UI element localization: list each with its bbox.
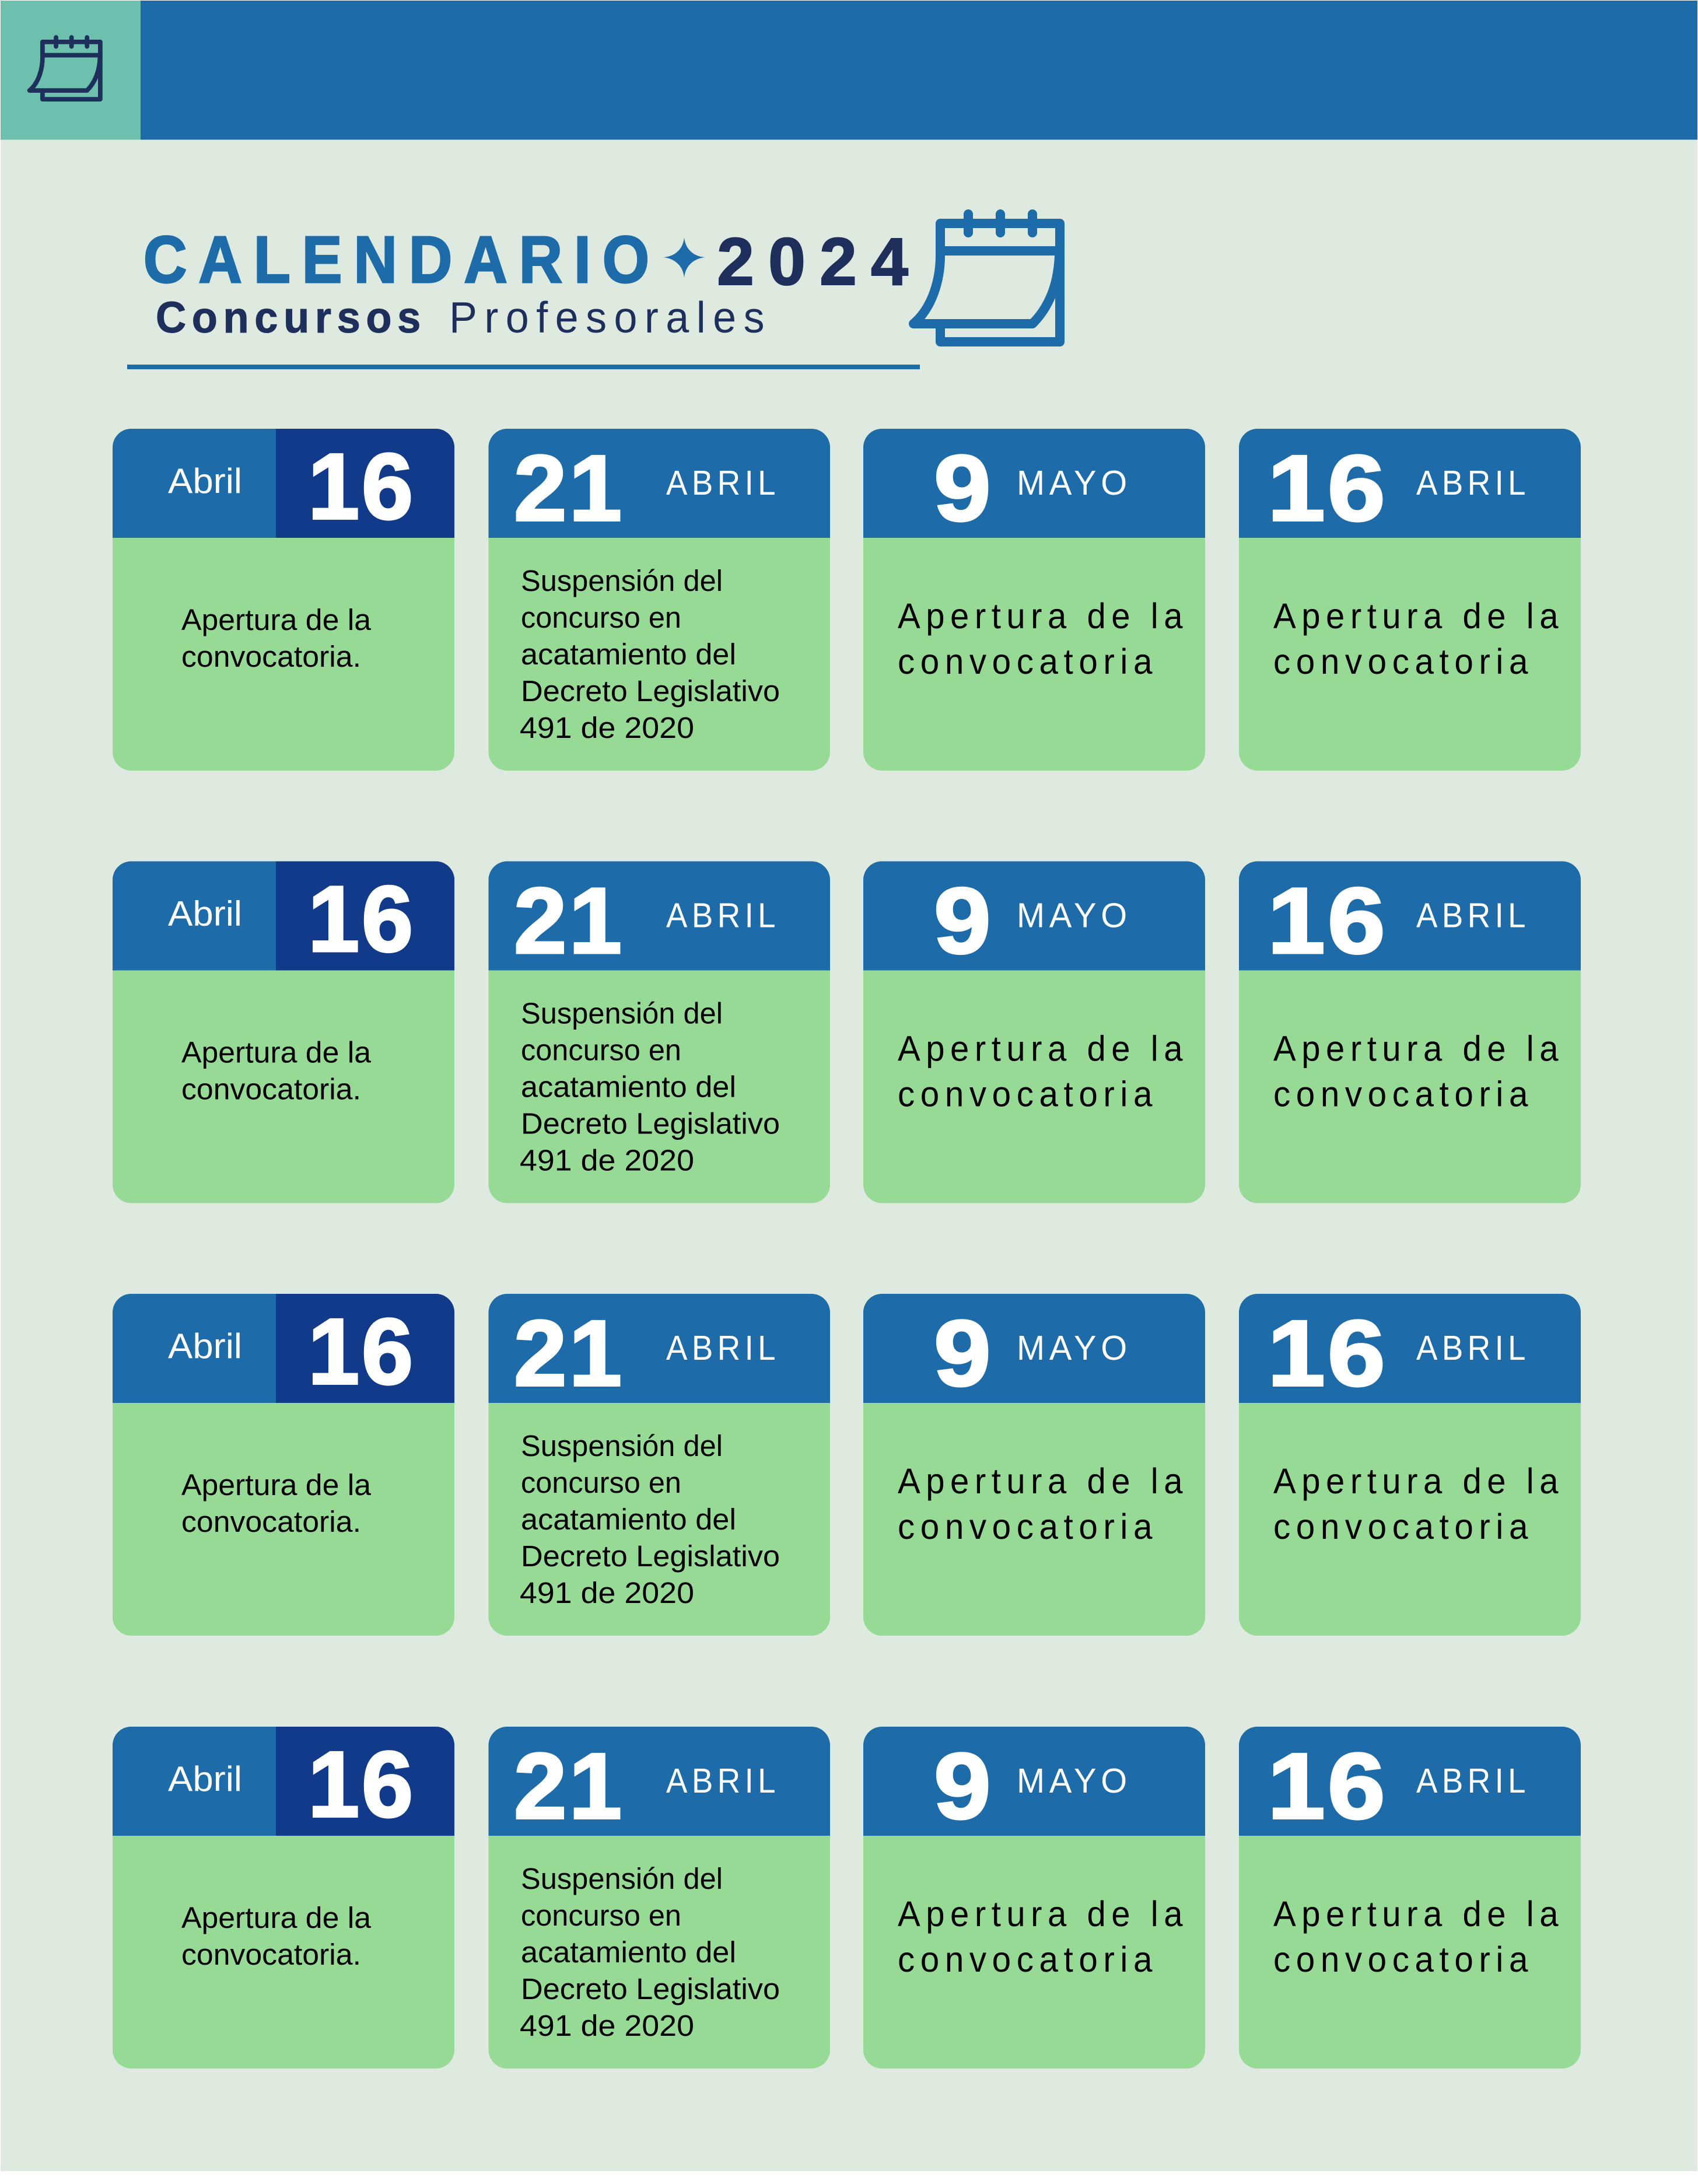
subtitle: Concursos: Concursos [156,293,426,342]
day: 16 [1268,868,1388,973]
day: 9 [934,868,993,973]
description: Apertura de la [181,1036,372,1069]
card header [863,1727,1205,1836]
description: 491 de 2020 [520,1576,694,1609]
day: 16 [308,434,415,538]
card body [113,861,454,1203]
card header [1239,1294,1581,1403]
description [520,564,780,744]
card header [863,861,1205,971]
description: Decreto Legislativo [521,1107,780,1140]
description: Apertura de la [898,1461,1188,1501]
description: convocatoria [898,1940,1158,1979]
day: 9 [934,436,993,540]
description [898,1029,1188,1114]
description: Decreto Legislativo [521,1539,780,1573]
card header [489,861,830,971]
date panel [276,1294,454,1403]
card body [1239,1727,1581,2068]
description: convocatoria. [181,1072,361,1106]
card: row 4 col 3 [863,1727,1205,2068]
card: row 2 col 1 [113,861,454,1203]
description [898,1894,1188,1979]
description [181,1901,372,1971]
card header [1239,429,1581,538]
description: convocatoria [1273,1940,1534,1979]
day: 16 [308,1732,415,1836]
description: Apertura de la [1273,1461,1564,1501]
description: Apertura de la [181,1468,372,1502]
card body [863,1727,1205,2068]
card: row 2 col 2 [489,861,830,1203]
icon: small calendar [30,37,103,99]
description: Apertura de la [1273,1029,1564,1069]
icon: large calendar [913,214,1065,342]
card header [863,429,1205,538]
card: row 4 col 1 [113,1727,454,2068]
title block [143,223,922,342]
description: concurso en [521,1899,681,1932]
card body [1239,1294,1581,1636]
description: convocatoria [1273,1507,1534,1546]
card: row 3 col 2 [489,1294,830,1636]
description: acatamiento del [521,638,736,671]
card: row 4 col 2 [489,1727,830,2068]
description: Apertura de la [1273,596,1564,636]
day: 16 [308,867,415,971]
description: Apertura de la [898,1894,1188,1934]
description: convocatoria. [181,1505,361,1538]
row 1 [113,429,1581,771]
card header [489,1727,830,1836]
card: row 1 col 2 [489,429,830,771]
description [1273,1029,1564,1114]
row 2 [113,861,1581,1203]
description: convocatoria. [181,1938,361,1971]
card header [863,1294,1205,1403]
description: concurso en [521,601,681,634]
card header [113,1294,454,1403]
description: convocatoria [1273,642,1534,681]
card: row 3 col 3 [863,1294,1205,1636]
month: Abril [168,461,242,501]
card: row 2 col 4 [1239,861,1581,1203]
description: convocatoria. [181,640,361,673]
card body [1239,861,1581,1203]
card header [489,1294,830,1403]
description [898,1461,1188,1546]
month: Abril [168,1326,242,1366]
card body [863,861,1205,1203]
month: Abril [168,1759,242,1798]
card: row 4 col 4 [1239,1727,1581,2068]
title: CALENDARIO: CALENDARIO [143,223,661,296]
description: Suspensión del [521,996,723,1030]
description: Apertura de la [1273,1894,1564,1934]
description [1273,596,1564,681]
row 4 [113,1727,1581,2068]
description [1273,1461,1564,1546]
date panel [276,1727,454,1836]
description: convocatoria [1273,1074,1534,1114]
description: concurso en [521,1034,681,1066]
description: acatamiento del [521,1936,736,1969]
card body [113,429,454,771]
description: Suspensión del [521,1429,723,1462]
day: 16 [1268,1301,1388,1405]
month: MAYO [1017,896,1132,935]
description [181,1036,372,1106]
date panel [276,429,454,538]
card body [489,1727,830,2068]
card: row 1 col 4 [1239,429,1581,771]
top banner [1,1,1697,140]
description: Apertura de la [181,1901,372,1934]
month: MAYO [1017,464,1132,502]
day: 21 [514,868,624,973]
banner icon tile [1,1,141,140]
description [181,1468,372,1538]
description: Suspensión del [521,1862,723,1895]
card: row 3 col 1 [113,1294,454,1636]
description: 491 de 2020 [520,1143,694,1177]
month: ABRIL [1416,1329,1530,1367]
day: 16 [308,1299,415,1404]
title: 2024: 2024 [717,225,922,299]
card body [113,1727,454,2068]
description: Apertura de la [898,1029,1188,1069]
card body [113,1294,454,1636]
description: acatamiento del [521,1503,736,1536]
description: convocatoria [898,1507,1158,1546]
day: 21 [514,436,624,540]
description [898,596,1188,681]
description [181,603,372,673]
day: 9 [934,1301,993,1405]
icon: star [663,237,705,278]
subtitle: Profesorales: Profesorales [449,293,772,342]
description: 491 de 2020 [520,711,694,744]
title underline [127,365,920,369]
card header [1239,1727,1581,1836]
day: 16 [1268,1734,1388,1838]
month: ABRIL [1416,896,1530,935]
description: Decreto Legislativo [521,674,780,708]
description: concurso en [521,1466,681,1499]
month: MAYO [1017,1762,1132,1800]
description: 491 de 2020 [520,2009,694,2042]
card: row 1 col 1 [113,429,454,771]
description: Suspensión del [521,564,723,597]
month: ABRIL [666,464,780,502]
day: 9 [934,1734,993,1838]
description: Apertura de la [181,603,372,636]
day: 16 [1268,436,1388,540]
card header [113,429,454,538]
day: 21 [514,1734,624,1838]
card: row 3 col 4 [1239,1294,1581,1636]
card header [489,429,830,538]
date panel [276,861,454,971]
card body [489,429,830,771]
description [520,1862,780,2042]
month: ABRIL [1416,1762,1530,1800]
card header [113,861,454,971]
month: ABRIL [666,1329,780,1367]
month: ABRIL [1416,464,1530,502]
month: ABRIL [666,896,780,935]
card header [1239,861,1581,971]
description [1273,1894,1564,1979]
card header [113,1727,454,1836]
card: row 1 col 3 [863,429,1205,771]
card body [863,1294,1205,1636]
card body [1239,429,1581,771]
description: acatamiento del [521,1070,736,1104]
description [520,996,780,1177]
month: MAYO [1017,1329,1132,1367]
description [520,1429,780,1609]
row 3 [113,1294,1581,1636]
description: Decreto Legislativo [521,1972,780,2006]
description: convocatoria [898,1074,1158,1114]
description: Apertura de la [898,596,1188,636]
day: 21 [514,1301,624,1405]
month: ABRIL [666,1762,780,1800]
card: row 2 col 3 [863,861,1205,1203]
card body [863,429,1205,771]
card body [489,861,830,1203]
description: convocatoria [898,642,1158,681]
month: Abril [168,894,242,933]
card body [489,1294,830,1636]
